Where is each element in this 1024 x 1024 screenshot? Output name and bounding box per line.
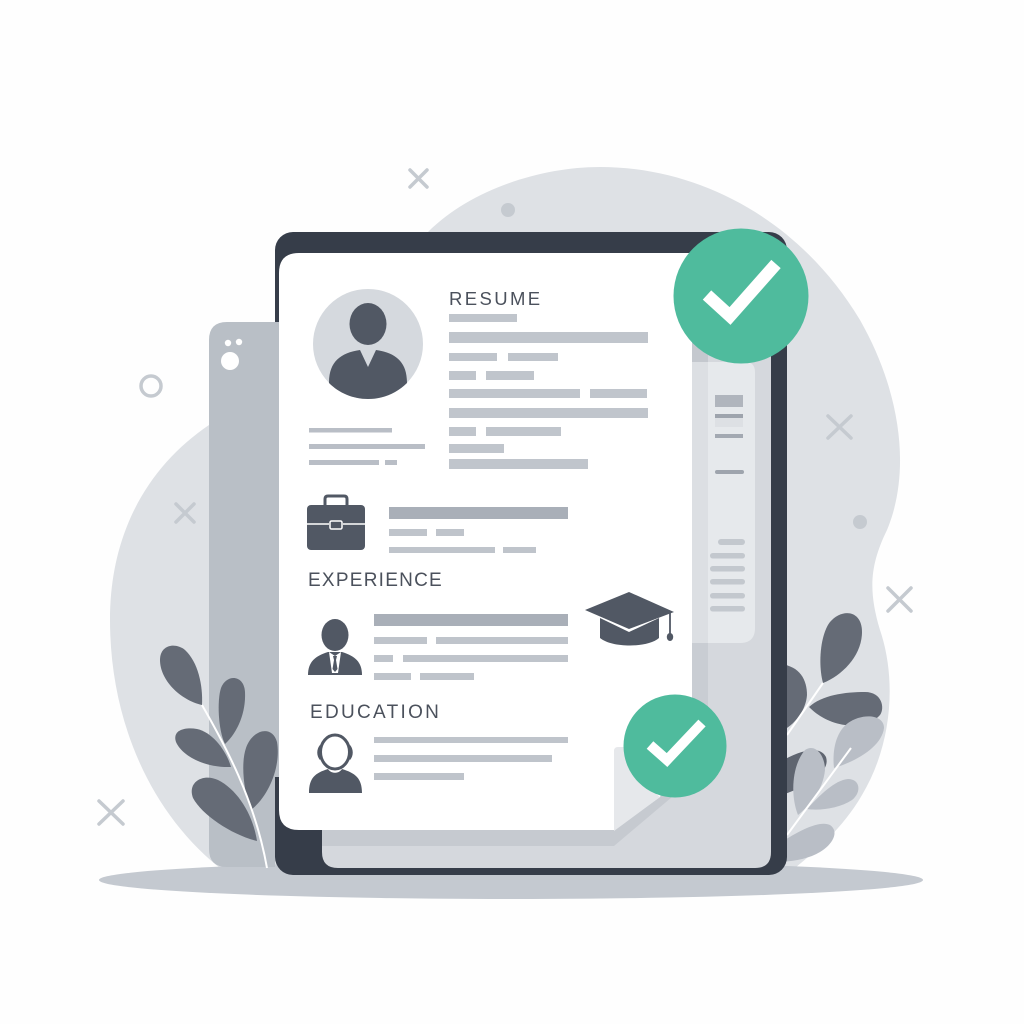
decorative marks [99,170,911,824]
paper under-shadow strip [322,790,672,846]
resume paper [279,253,692,830]
second block text lines [374,614,568,680]
heading: resume: RESUME [449,288,543,309]
check badge: large [674,228,808,364]
icon: briefcase [307,496,365,550]
heading: experience: EXPERIENCE [308,570,443,591]
side strip and scroll card [692,340,755,763]
icon: graduation cap [585,592,674,646]
device frame [275,232,787,875]
third block text lines [374,737,568,780]
folded corner [614,747,660,831]
heading: education: EDUCATION [310,702,441,723]
left grey panel [209,322,279,867]
icon: person outline [309,735,362,793]
background blob [110,167,900,872]
icon: person with tie [308,619,362,675]
contact text lines [309,428,425,465]
experience text lines [389,507,568,553]
resume text lines [449,314,648,469]
right plant [780,613,884,862]
left plant [160,646,278,868]
avatar [313,289,423,399]
check badge: small [624,694,726,798]
ground shadow [99,861,923,899]
